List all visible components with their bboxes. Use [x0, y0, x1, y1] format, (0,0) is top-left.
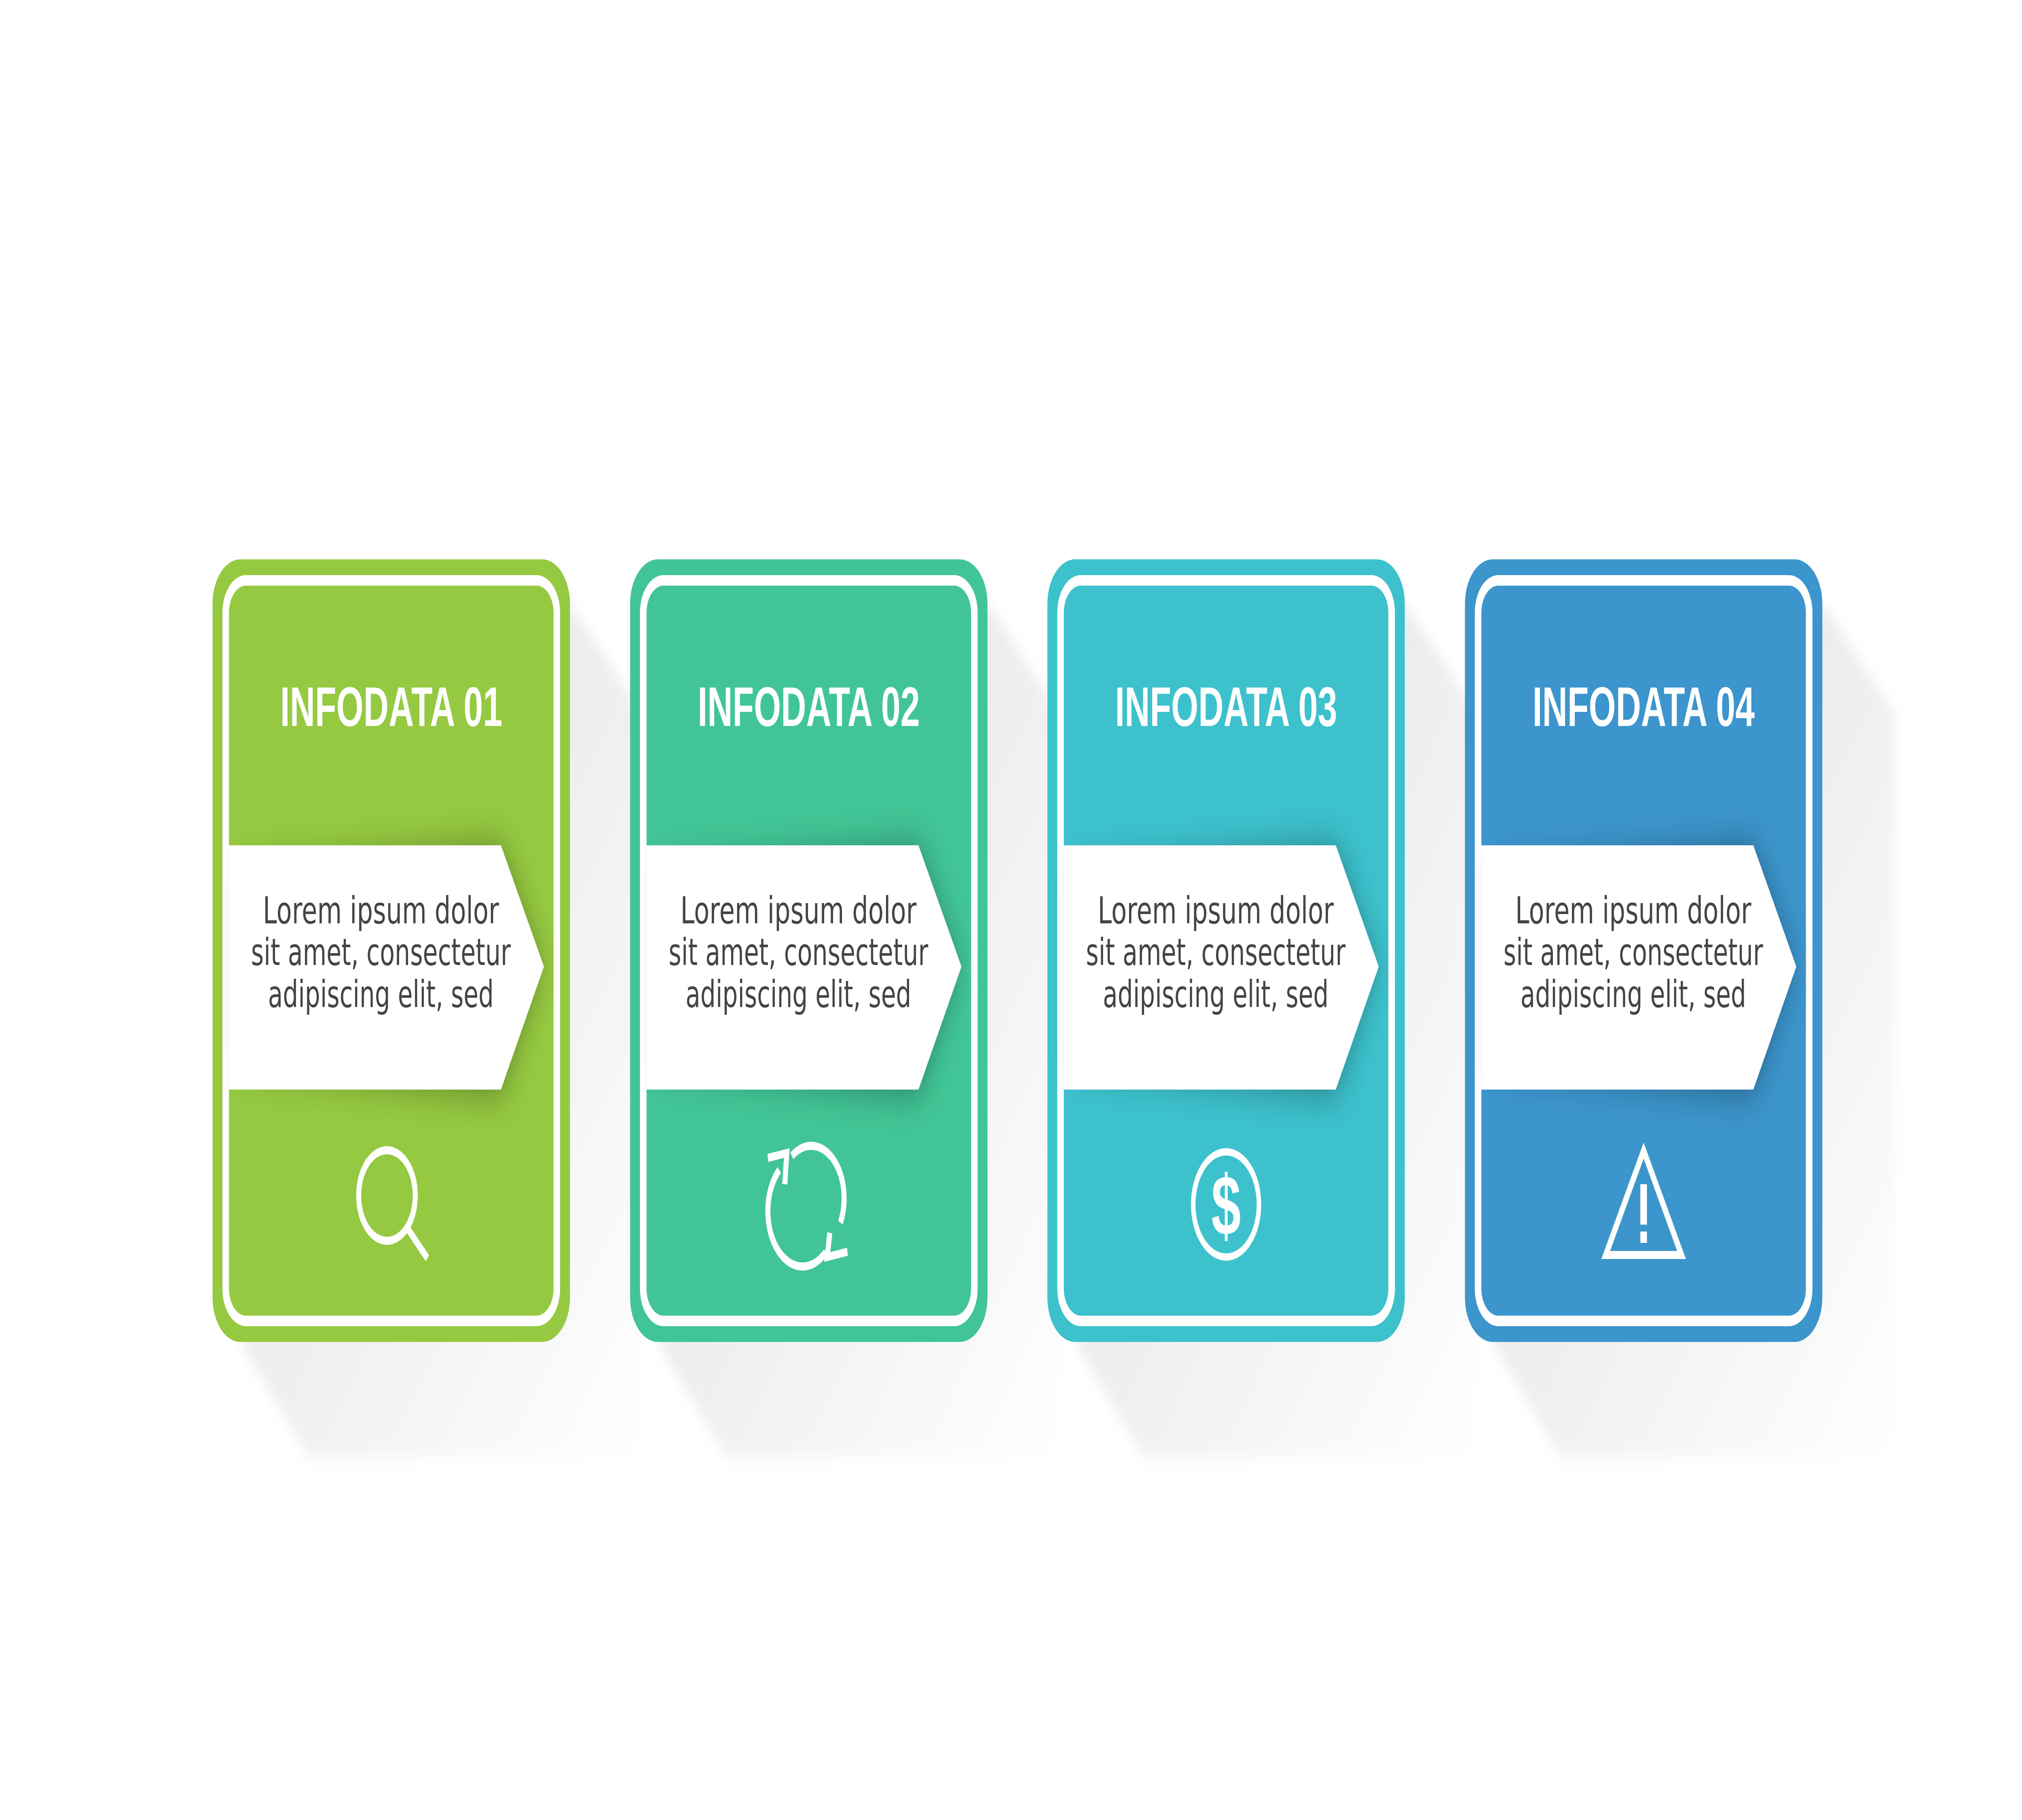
icon: warning [1606, 1151, 1681, 1255]
arrow band with text: adipiscing elit, sed [1521, 973, 1746, 1016]
card 2 [630, 559, 1060, 1457]
icon: refresh [768, 1146, 848, 1266]
arrow band with text: Lorem ipsum dolor [680, 889, 917, 933]
icon: magnifier [359, 1150, 427, 1258]
arrow band with text: Lorem ipsum dolor [263, 889, 499, 933]
icon: dollar: $ [1211, 1158, 1241, 1253]
card 1 [213, 559, 642, 1457]
arrow band with text: Lorem ipsum dolor [1515, 889, 1751, 933]
arrow band with text: adipiscing elit, sed [1103, 973, 1328, 1016]
title: INFODATA 03 [1115, 676, 1337, 738]
icon: dollar [1193, 1152, 1259, 1257]
arrow band with text [1481, 845, 1796, 1090]
arrow band with text: sit amet, consectetur [251, 931, 511, 974]
arrow band with text: sit amet, consectetur [668, 931, 929, 974]
arrow band with text: sit amet, consectetur [1504, 931, 1763, 974]
arrow band with text: adipiscing elit, sed [268, 973, 494, 1016]
arrow band with text [647, 845, 962, 1090]
title: INFODATA 01 [280, 676, 502, 738]
arrow band with text: sit amet, consectetur [1086, 931, 1346, 974]
arrow band with text [229, 845, 544, 1090]
arrow band with text: Lorem ipsum dolor [1098, 889, 1334, 933]
arrow band with text [1064, 845, 1379, 1090]
arrow band with text: adipiscing elit, sed [685, 973, 911, 1016]
card 3 [1047, 559, 1477, 1457]
card 4 [1465, 559, 1895, 1457]
title: INFODATA 04 [1533, 676, 1755, 738]
title: INFODATA 02 [698, 676, 920, 738]
